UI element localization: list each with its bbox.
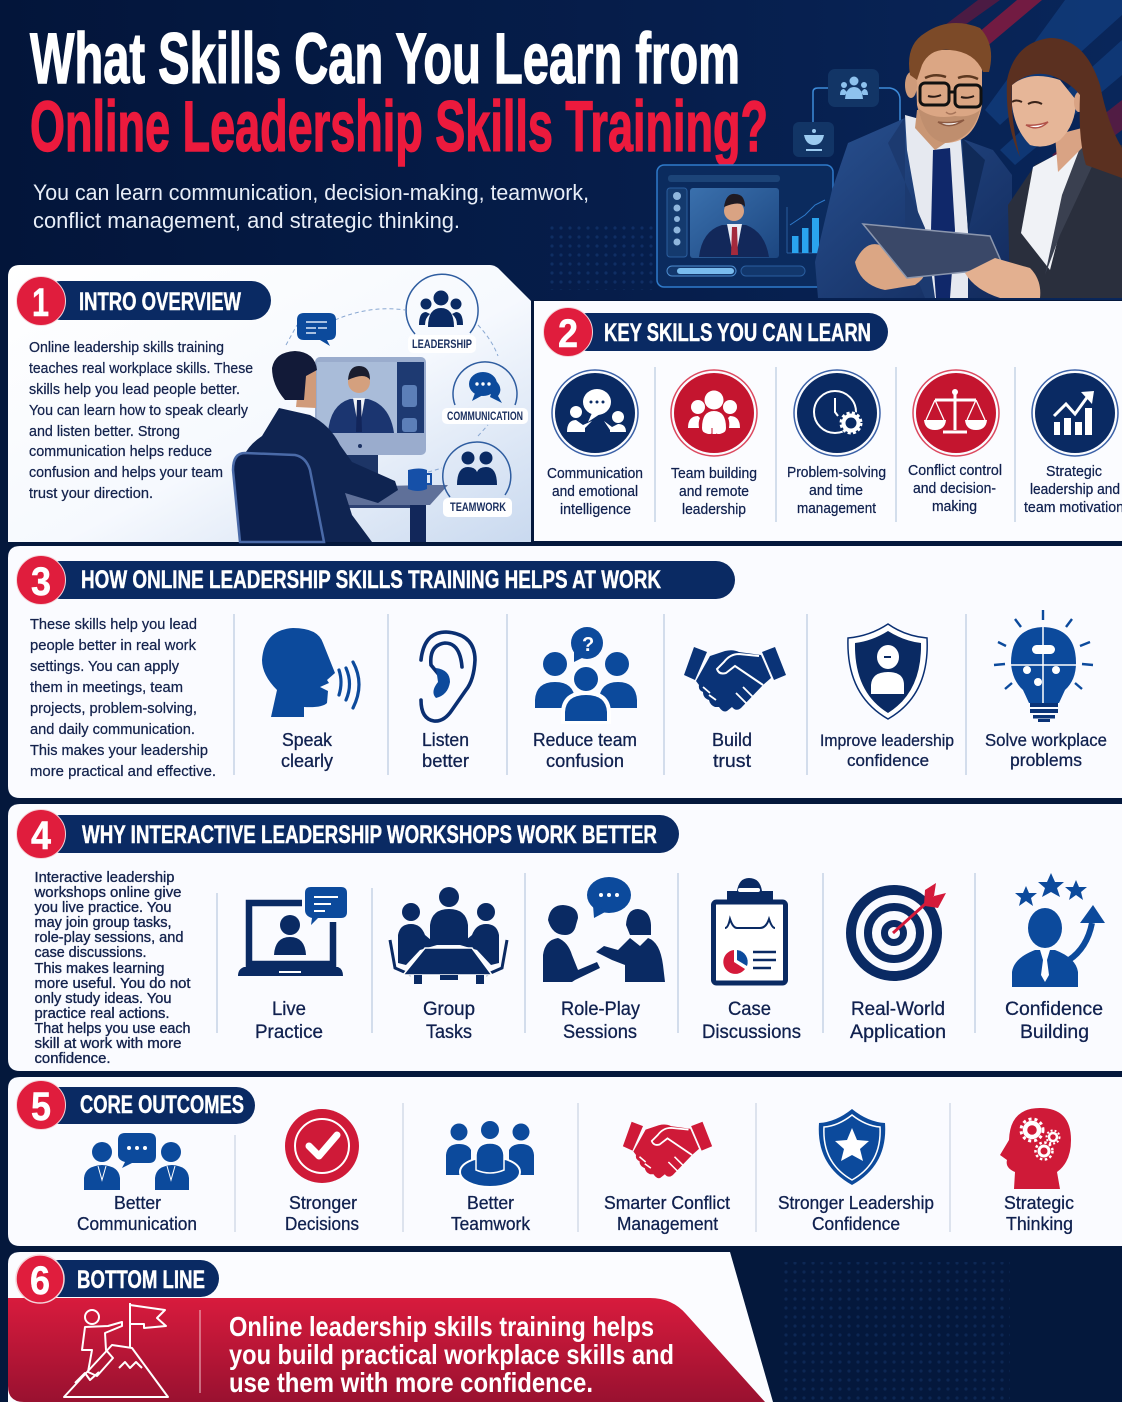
section 4 labels: Real-World (851, 998, 945, 1020)
section 4 text: case discussions. (34, 945, 146, 961)
icon: confidence building (1012, 873, 1105, 987)
icon: leadership badge: LEADERSHIP (412, 337, 472, 351)
decoration: bottom right dots (780, 1262, 1010, 1402)
section 3 labels: problems (1010, 750, 1082, 770)
intro text (29, 339, 253, 502)
skill labels: Team building (671, 465, 757, 482)
section 4 text: confidence. (34, 1051, 110, 1067)
section 4 text: This makes learning (34, 961, 164, 977)
section 6 heading (16, 1255, 219, 1303)
icon: smarter conflict management (623, 1122, 712, 1178)
icon: teamwork badge: TEAMWORK (450, 500, 506, 514)
icon: build trust (684, 647, 786, 712)
section 3 labels: better (422, 750, 469, 771)
intro text: teaches real workplace skills. These (29, 360, 253, 377)
section 3 labels: Speak (282, 729, 333, 750)
section 3 text: them in meetings, team (30, 679, 183, 696)
hero illustration: tablet and hands (855, 224, 1040, 298)
section 4 labels (255, 998, 1103, 1043)
red message banner (8, 1298, 765, 1402)
section 4 text: practice real actions. (34, 1006, 170, 1022)
section 4 labels: Live (272, 998, 306, 1020)
icon: climber with flag on mountain (64, 1303, 168, 1397)
section 3 heading: HOW ONLINE LEADERSHIP SKILLS TRAINING HELPS AT WORK (81, 566, 661, 594)
bottom line message: Online leadership skills training helps (229, 1311, 654, 1342)
section 5 labels: Better (467, 1192, 514, 1213)
section 2 heading: 2 (558, 312, 578, 356)
skill labels: intelligence (560, 501, 631, 518)
hero illustration: online training screen (657, 165, 833, 287)
section 5 labels: Teamwork (451, 1213, 531, 1234)
section 4 heading: WHY INTERACTIVE LEADERSHIP WORKSHOPS WORK BETTER (82, 821, 657, 849)
section 5 heading: CORE OUTCOMES (80, 1091, 244, 1119)
skill: conflict control and decision-making (913, 370, 999, 456)
subtitle (33, 180, 589, 233)
panel 3: how training helps at work (8, 546, 1122, 798)
section 4 text: skill at work with more (34, 1036, 182, 1052)
section 4 labels: Application (850, 1021, 946, 1043)
section 4 labels: Group (423, 998, 475, 1020)
section 4 labels: Discussions (702, 1021, 801, 1043)
section 5 labels: Strategic (1004, 1192, 1074, 1213)
icon: teamwork badge (443, 442, 512, 517)
hero illustration: network icons (793, 69, 900, 157)
skill labels: leadership (682, 501, 746, 518)
section 4 text: more useful. You do not (34, 976, 190, 992)
section 4 text: That helps you use each (34, 1021, 190, 1037)
icon: real-world application (851, 883, 946, 976)
section 5 labels: Communication (77, 1213, 197, 1234)
section 5 labels: Stronger (289, 1192, 357, 1213)
section 5 labels (77, 1192, 1074, 1234)
hero illustration: businesswoman (1007, 38, 1122, 298)
icon: strategic thinking (1000, 1108, 1071, 1189)
section 4 labels: Case (728, 998, 771, 1020)
section 3 labels: Improve leadership (820, 731, 954, 750)
section 3 labels: trust (713, 750, 751, 771)
icon: listen better (421, 632, 475, 721)
section 3 heading (16, 556, 735, 604)
title (30, 20, 768, 167)
section 3 text (30, 616, 216, 780)
bottom line message: you build practical workplace skills and (229, 1339, 674, 1370)
icon: better communication (84, 1133, 189, 1190)
section 3 labels: Reduce team (533, 729, 637, 750)
icon: case discussions (714, 878, 786, 983)
panel 5: core outcomes (8, 1077, 1122, 1246)
section 4 text: workshops online give (33, 885, 182, 901)
section 5 labels: Confidence (812, 1213, 900, 1234)
intro text: trust your direction. (29, 485, 153, 502)
icon: reduce team confusion: ? (582, 634, 594, 656)
illustration: person at computer (233, 351, 398, 542)
skill labels: Communication (547, 465, 643, 482)
section 2 heading (544, 308, 888, 356)
skill labels: and decision- (913, 480, 996, 497)
section 1 heading (16, 276, 271, 326)
section 5 labels: Better (114, 1192, 161, 1213)
icon: stronger decisions (285, 1109, 359, 1183)
section 6 heading: 6 (30, 1259, 50, 1303)
intro text: communication helps reduce (29, 443, 212, 460)
skill labels: and remote (679, 483, 749, 500)
section 5 labels: Smarter Conflict (604, 1192, 730, 1213)
section 3 text: and daily communication. (30, 721, 195, 738)
section 3 text: This makes your leadership (30, 742, 208, 759)
skill labels: management (797, 500, 877, 517)
icon: stronger leadership confidence (819, 1109, 885, 1185)
section 4 text: may join group tasks, (34, 915, 172, 931)
section 3 labels: confusion (546, 750, 624, 771)
section 5 labels: Decisions (285, 1213, 359, 1234)
section 5 labels: Management (617, 1213, 718, 1234)
panel 1: intro overview (8, 265, 531, 542)
intro text: confusion and helps your team (29, 464, 223, 481)
section 3 labels: confidence (847, 751, 929, 770)
icon: communication badge: COMMUNICATION (447, 409, 523, 423)
section 4 text: Interactive leadership (34, 870, 174, 886)
icon: reduce team confusion (535, 627, 637, 724)
section 4 labels: Sessions (563, 1021, 637, 1043)
skill labels: Strategic (1046, 463, 1102, 480)
illustration: desk and mug (334, 468, 448, 542)
section 5 heading: 5 (31, 1085, 51, 1129)
section 2 heading: KEY SKILLS YOU CAN LEARN (604, 319, 871, 347)
icon: group tasks (390, 887, 507, 984)
skill labels: and emotional (552, 483, 638, 500)
panel 6: bottom line (8, 1252, 773, 1402)
section 4 text: role-play sessions, and (34, 930, 184, 946)
section 3 text: people better in real work (30, 637, 196, 654)
section 3 text: These skills help you lead (30, 616, 197, 633)
bottom line message: use them with more confidence. (229, 1367, 593, 1398)
skill labels: Conflict control (908, 462, 1002, 479)
section 4 labels: Confidence (1005, 998, 1103, 1020)
section 4 text: you live practice. You (34, 900, 172, 916)
section 5 labels: Thinking (1006, 1213, 1073, 1234)
section 3 labels: clearly (281, 750, 334, 771)
skill labels: Problem-solving (787, 464, 886, 481)
skill labels: making (932, 498, 977, 515)
section 1 heading: 1 (32, 281, 49, 325)
section 6 heading: BOTTOM LINE (77, 1266, 205, 1294)
icon: leadership badge (406, 274, 478, 353)
icon: communication badge (442, 362, 528, 424)
section 3 labels: Listen (422, 729, 469, 750)
icon: live practice (238, 887, 347, 976)
section 4 text (33, 870, 190, 1067)
section 3 labels (281, 729, 1107, 771)
section 3 heading: 3 (31, 560, 51, 604)
section 3 text: settings. You can apply (30, 658, 179, 675)
section 4 heading: 4 (31, 814, 52, 858)
skill: team building and remote leadership (671, 370, 757, 456)
section 4 labels: Role-Play (561, 998, 640, 1020)
hero background (0, 0, 1122, 300)
skill: strategic leadership and team motivation (1032, 370, 1118, 456)
skill: communication and emotional intelligence (552, 370, 638, 456)
section 1 heading: INTRO OVERVIEW (79, 288, 241, 316)
hero illustration: businessman (815, 23, 1012, 298)
panel 2: key skills (534, 301, 1122, 541)
intro text: Online leadership skills training (29, 339, 224, 356)
section 4 labels: Building (1020, 1021, 1089, 1043)
section 4 labels: Practice (255, 1021, 323, 1043)
icon: improve leadership confidence (848, 624, 927, 719)
section 3 text: projects, problem-solving, (30, 700, 197, 717)
skill: problem-solving and time management (794, 370, 880, 456)
skill labels (547, 462, 1122, 518)
section 4 labels: Tasks (426, 1021, 472, 1043)
section 3 labels: Solve workplace (985, 730, 1107, 750)
skill labels: and time (809, 482, 863, 499)
intro text: and listen better. Strong (29, 423, 180, 440)
icon: role-play sessions (543, 877, 665, 982)
bottom line message (229, 1311, 674, 1398)
section 4 text: only study ideas. You (34, 991, 172, 1007)
title: What Skills Can You Learn from (30, 20, 740, 99)
section 5 heading (16, 1080, 255, 1130)
icon: solve workplace problems (994, 610, 1093, 722)
section 4 heading (16, 810, 679, 858)
intro text: skills help you lead people better. (29, 381, 240, 398)
panel 4: why interactive workshops work better (8, 804, 1122, 1071)
icon: chat bubble and dashed links (286, 309, 498, 478)
icon: speak clearly (262, 628, 359, 717)
section 3 labels: Build (712, 729, 752, 750)
subtitle: conflict management, and strategic thinking. (33, 208, 460, 233)
hero decoration: diagonal stripes (545, 0, 1122, 290)
section 5 labels: Stronger Leadership (778, 1192, 934, 1213)
intro text: You can learn how to speak clearly (29, 402, 248, 419)
illustration: video monitor (315, 357, 426, 479)
section 3 text: more practical and effective. (30, 763, 216, 780)
subtitle: You can learn communication, decision-making, teamwork, (33, 180, 589, 205)
icon: better teamwork (446, 1121, 534, 1187)
